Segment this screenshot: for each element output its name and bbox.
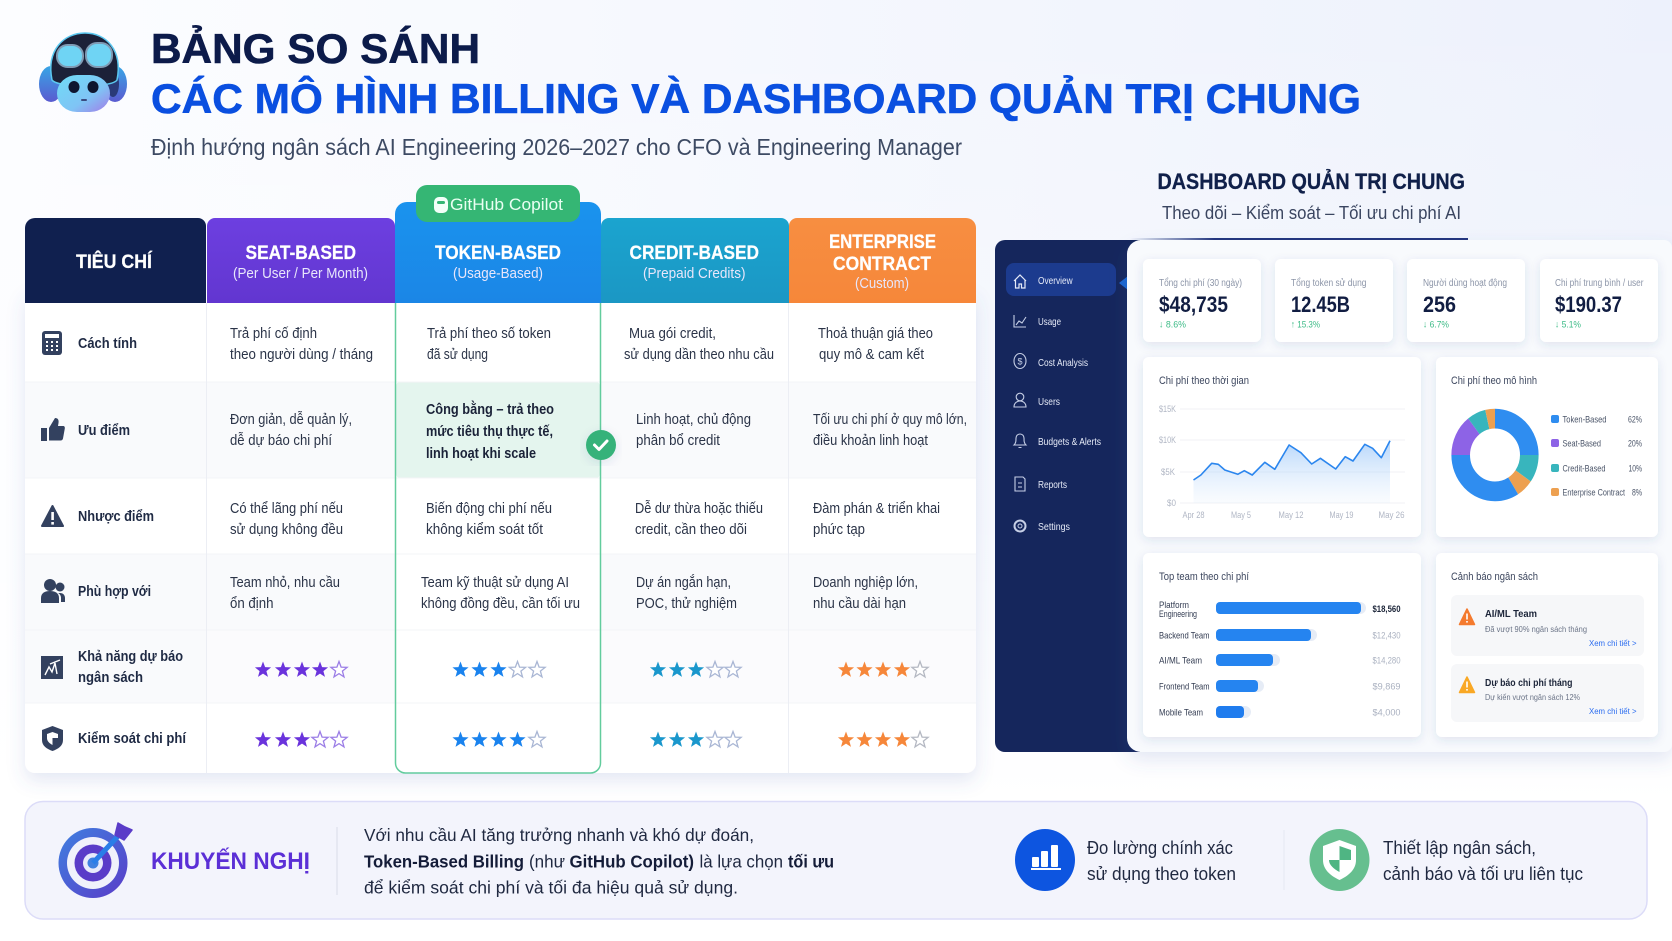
nav: users: Users	[1038, 396, 1060, 408]
header: Seat-Based	[207, 218, 395, 303]
rating: enterprise control	[838, 732, 928, 747]
main content area	[1127, 240, 1672, 752]
icon: check badge	[586, 430, 616, 460]
metric: total tokens	[1275, 259, 1393, 342]
row: Cách tính: Trả phí theo số token	[427, 326, 551, 342]
sidebar	[995, 240, 1140, 752]
bar: platform engineering: Engineering	[1159, 609, 1197, 620]
row: Ưu điểm: Ưu điểm	[78, 423, 130, 439]
header: Tiêu chí	[25, 218, 206, 303]
alert: AI/ML team	[1451, 595, 1644, 656]
metric: average cost per user: ↓ 5.1%	[1555, 320, 1581, 330]
header: Credit-Based: (Prepaid Credits)	[643, 266, 746, 282]
rating: enterprise forecast	[838, 662, 928, 677]
row: Nhược điểm	[42, 500, 940, 538]
legend: Enterprise Contract	[1562, 488, 1625, 498]
header: Enterprise Contract	[789, 218, 976, 303]
bar chart: top teams: Top team theo chi phí	[1159, 571, 1249, 583]
dashboard heading: DASHBOARD QUẢN TRỊ CHUNG	[1158, 169, 1465, 194]
panel: budget alerts	[1436, 553, 1658, 737]
line chart: cost over time	[1143, 357, 1421, 537]
nav: overview active	[1006, 263, 1128, 296]
row: Ưu điểm: mức tiêu thụ thực tế,	[426, 424, 553, 440]
header: Credit-Based: CREDIT-BASED	[630, 243, 759, 264]
benefit: budgets and alerts: Thiết lập ngân sách,	[1383, 838, 1536, 858]
panel: recommendation	[25, 802, 1647, 919]
icon: shield	[42, 726, 63, 751]
row: Ưu điểm: Tối ưu chi phí ở quy mô lớn,	[813, 412, 967, 428]
panel: comparison table	[25, 185, 976, 773]
line chart: cost over time: $0	[1167, 498, 1176, 509]
donut chart: cost by model	[1436, 357, 1658, 537]
metric: active users: 256	[1423, 292, 1456, 317]
nav: usage: Usage	[1038, 316, 1061, 328]
legend: Token-Based	[1562, 414, 1606, 426]
icon: warning	[42, 506, 63, 526]
metric: total tokens: ↑ 15.3%	[1291, 320, 1320, 330]
header: Seat-Based: (Per User / Per Month)	[233, 266, 368, 282]
row: Phù hợp với: Team kỹ thuật sử dụng AI	[421, 575, 569, 591]
row: Phù hợp với: Phù hợp với	[78, 584, 151, 600]
line chart: cost over time: May 19	[1330, 510, 1354, 521]
rating: credit control	[650, 732, 741, 747]
row: Ưu điểm: điều khoản linh hoạt	[813, 433, 928, 449]
line chart: cost over time: May 5	[1231, 510, 1251, 521]
row: Khả năng dự báo ngân sách: Khả năng dự báo	[78, 649, 183, 665]
nav: reports: Reports	[1038, 479, 1067, 491]
row: Phù hợp với: không đồng đều, cần tối ưu	[421, 596, 580, 612]
row: Phù hợp với	[41, 574, 918, 612]
recommendation text: để kiểm soát chi phí và tối đa hiệu quả sử dụng.	[364, 878, 738, 898]
bar: mobile team	[1159, 706, 1400, 718]
row: Ưu điểm: linh hoạt khi scale	[426, 446, 536, 462]
row: Nhược điểm: không kiểm soát tốt	[426, 522, 543, 538]
recommendation text: tối ưu	[788, 852, 834, 872]
row: Nhược điểm: Dễ dư thừa hoặc thiếu	[635, 500, 763, 517]
recommendation text: Với nhu cầu AI tăng trưởng nhanh và khó dự đoán,	[364, 825, 754, 845]
row: Cách tính: đã sử dụng	[427, 347, 488, 363]
bar: backend team: $12,430	[1372, 630, 1400, 642]
bar: platform engineering: Platform	[1159, 600, 1189, 611]
subtitle: Định hướng ngân sách AI Engineering 2026–2027 cho CFO và Engineering Manager	[151, 134, 962, 160]
line chart: cost over time: $15K	[1159, 404, 1177, 415]
legend: 20%	[1628, 438, 1642, 450]
bar: frontend team	[1159, 680, 1400, 692]
nav: users	[1014, 393, 1060, 408]
legend: Credit-Based	[1562, 464, 1606, 474]
header: Token-Based: (Usage-Based)	[453, 266, 543, 282]
header: Enterprise Contract: CONTRACT	[833, 254, 931, 275]
row: Ưu điểm: Đơn giản, dễ quản lý,	[230, 411, 352, 428]
bar: mobile team: $4,000	[1372, 708, 1400, 718]
bar: ai ml team: AI/ML Team	[1159, 656, 1202, 666]
row: Nhược điểm: credit, cần theo dõi	[635, 522, 747, 538]
title: CÁC MÔ HÌNH BILLING VÀ DASHBOARD QUẢN TRỊ CHUNG	[151, 74, 1361, 122]
icon: target	[58, 823, 132, 898]
row: Ưu điểm	[41, 400, 967, 462]
dashboard heading	[1158, 169, 1465, 223]
rating: token forecast	[452, 662, 545, 677]
dashboard heading: Theo dõi – Kiểm soát – Tối ưu chi phí AI	[1162, 203, 1461, 223]
bar: platform engineering	[1159, 600, 1400, 620]
metric: total tokens: 12.45B	[1291, 292, 1350, 317]
legend: 8%	[1632, 488, 1642, 498]
line chart: cost over time: Chi phí theo thời gian	[1159, 375, 1249, 387]
nav: settings	[1014, 520, 1070, 533]
title: BẢNG SO SÁNH	[151, 24, 480, 72]
nav: settings: Settings	[1038, 521, 1070, 533]
metric: average cost per user: Chi phí trung bình / user	[1555, 278, 1644, 289]
bar: backend team: Backend Team	[1159, 630, 1210, 642]
row: Phù hợp với: ổn định	[230, 596, 274, 612]
legend	[1551, 414, 1642, 498]
metric: average cost per user: $190.37	[1555, 292, 1622, 317]
metric: total tokens: Tổng token sử dụng	[1291, 277, 1366, 289]
row: Cách tính: Mua gói credit,	[629, 326, 716, 342]
benefit: measure token usage: Đo lường chính xác	[1087, 838, 1233, 858]
row: Cách tính: theo người dùng / tháng	[230, 347, 373, 363]
nav: budgets and alerts	[1014, 434, 1101, 448]
metric: total cost: Tổng chi phí (30 ngày)	[1159, 277, 1242, 289]
benefit: measure token usage	[1015, 829, 1236, 891]
bar: backend team	[1159, 629, 1400, 642]
title	[151, 24, 1361, 122]
row: Nhược điểm: Có thể lãng phí nếu	[230, 501, 343, 517]
line chart: cost over time: May 12	[1278, 510, 1304, 521]
row: Cách tính	[42, 326, 933, 363]
header: Seat-Based: SEAT-BASED	[246, 243, 356, 264]
nav: budgets and alerts: Budgets & Alerts	[1038, 436, 1101, 448]
rating: seat control	[255, 732, 347, 747]
row: Ưu điểm: Linh hoạt, chủ động	[636, 412, 751, 428]
bar: ai ml team: $14,280	[1372, 656, 1400, 666]
dashboard top accent line	[1130, 238, 1468, 240]
benefit: measure token usage: sử dụng theo token	[1087, 864, 1236, 884]
row: Cách tính: sử dụng dần theo nhu cầu	[624, 347, 774, 363]
row: Phù hợp với: Doanh nghiệp lớn,	[813, 575, 918, 591]
row: Khả năng dự báo ngân sách	[41, 649, 928, 686]
alert: monthly forecast: Dự kiến vượt ngân sách 12%	[1485, 692, 1580, 702]
recommendation text: Token-Based Billing	[364, 852, 524, 872]
badge: GitHub Copilot: GitHub Copilot	[450, 195, 563, 214]
row: Kiểm soát chi phí	[42, 726, 928, 751]
icon: robot mascot	[39, 33, 127, 112]
nav: cost analysis	[1014, 354, 1088, 369]
row: Ưu điểm: dễ dự báo chi phí	[230, 432, 332, 449]
row: Kiểm soát chi phí: Kiểm soát chi phí	[78, 731, 187, 747]
line chart: cost over time: $5K	[1161, 467, 1176, 478]
recommendation text: là lựa chọn	[700, 852, 783, 872]
row: Ưu điểm: Công bằng – trả theo	[426, 400, 554, 418]
row: Cách tính: Trả phí cố định	[230, 326, 317, 342]
alert: monthly forecast	[1451, 664, 1644, 722]
alert: monthly forecast: Xem chi tiết >	[1589, 706, 1637, 716]
bar chart: top teams	[1143, 553, 1421, 737]
line chart: cost over time: $10K	[1159, 435, 1177, 446]
row: Ưu điểm: phân bổ credit	[636, 433, 720, 449]
donut chart: cost by model: Chi phí theo mô hình	[1451, 375, 1537, 387]
rating: seat forecast	[255, 662, 347, 677]
row: Cách tính: Cách tính	[78, 336, 137, 352]
legend: Seat-Based	[1562, 438, 1601, 450]
benefit: budgets and alerts	[1310, 829, 1583, 891]
row: Phù hợp với: nhu cầu dài hạn	[813, 596, 906, 612]
row: Nhược điểm: Đàm phán & triển khai	[813, 501, 940, 517]
highlight border: token column	[396, 303, 600, 773]
bar: ai ml team	[1159, 654, 1400, 666]
bar: mobile team: Mobile Team	[1159, 708, 1203, 718]
line chart: cost over time: May 26	[1378, 510, 1404, 521]
icon: users	[41, 579, 65, 603]
row: Phù hợp với: Team nhỏ, nhu cầu	[230, 575, 340, 591]
header: Enterprise Contract: ENTERPRISE	[829, 232, 936, 253]
heading: Khuyến nghị: KHUYẾN NGHỊ	[151, 847, 310, 875]
legend: 10%	[1628, 464, 1642, 474]
alert: monthly forecast: Dự báo chi phí tháng	[1485, 677, 1572, 689]
alert: AI/ML team: Đã vượt 90% ngân sách tháng	[1485, 624, 1587, 634]
row: Nhược điểm: Biến động chi phí nếu	[426, 501, 552, 517]
metric: total cost	[1143, 259, 1261, 342]
rating: token control	[452, 732, 545, 747]
bar: frontend team: Frontend Team	[1159, 682, 1210, 692]
bar: platform engineering: $18,560	[1372, 604, 1400, 615]
icon: forecast chart	[41, 656, 63, 679]
bar: frontend team: $9,869	[1372, 682, 1400, 692]
nav: reports	[1015, 477, 1067, 491]
header: Tiêu chí: TIÊU CHÍ	[76, 251, 153, 273]
metric: active users: ↓ 6.7%	[1423, 320, 1449, 330]
row: Phù hợp với: POC, thử nghiệm	[636, 596, 737, 612]
panel: dashboard	[995, 238, 1672, 752]
rating: credit forecast	[650, 662, 741, 677]
benefit: budgets and alerts: cảnh báo và tối ưu liên tục	[1383, 864, 1583, 884]
row: Nhược điểm: phức tạp	[813, 522, 865, 538]
line chart: cost over time: Apr 28	[1182, 510, 1204, 521]
row: Cách tính: quy mô & cam kết	[819, 347, 924, 363]
header: Enterprise Contract: (Custom)	[855, 276, 909, 292]
metric: active users: Người dùng hoạt động	[1423, 278, 1507, 289]
header: Credit-Based	[601, 218, 789, 303]
row: Nhược điểm: sử dụng không đều	[230, 522, 343, 538]
nav: cost analysis: $	[1017, 356, 1023, 366]
header: Token-Based: TOKEN-BASED	[435, 243, 561, 264]
icon: thumbs up	[41, 418, 65, 441]
badge: GitHub Copilot	[416, 185, 580, 222]
recommendation text	[364, 825, 834, 898]
row: Khả năng dự báo ngân sách: ngân sách	[78, 670, 143, 686]
nav: usage	[1014, 315, 1061, 328]
legend: 62%	[1628, 414, 1642, 426]
metric: total cost: ↓ 8.6%	[1159, 320, 1187, 330]
panel: budget alerts: Cảnh báo ngân sách	[1451, 571, 1538, 583]
metric: average cost per user	[1540, 259, 1658, 342]
header: Token-Based	[395, 202, 601, 303]
metric: total cost: $48,735	[1159, 292, 1228, 317]
alert: AI/ML team: AI/ML Team	[1485, 608, 1537, 620]
row: Phù hợp với: Dự án ngắn hạn,	[636, 574, 731, 591]
metric: active users	[1407, 259, 1525, 342]
recommendation text: (như	[529, 852, 565, 872]
row: Nhược điểm: Nhược điểm	[78, 509, 154, 525]
recommendation text: GitHub Copilot)	[570, 852, 694, 872]
table body background	[25, 290, 976, 773]
row: Cách tính: Thoả thuận giá theo	[818, 326, 933, 342]
icon: calculator	[42, 331, 62, 355]
nav: cost analysis: Cost Analysis	[1038, 357, 1088, 369]
nav: overview active: Overview	[1038, 275, 1073, 287]
alert: AI/ML team: Xem chi tiết >	[1589, 638, 1637, 648]
